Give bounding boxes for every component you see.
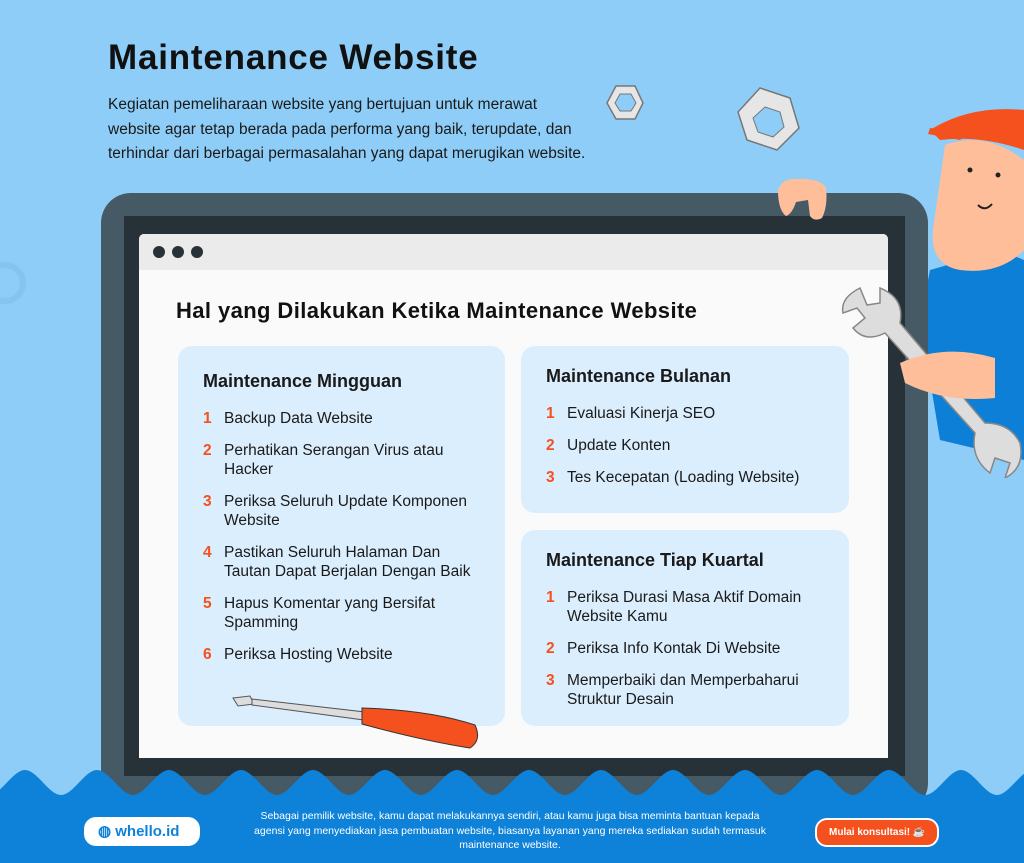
panel: monthly: Maintenance Bulanan — [546, 366, 731, 386]
panel: weekly: Perhatikan Serangan Virus atau Hacker — [224, 442, 443, 478]
panel: weekly: Periksa Hosting Website — [224, 646, 393, 663]
icon: screwdriver — [232, 696, 478, 748]
panel: quarterly: 2 — [546, 640, 555, 657]
panel: quarterly: Maintenance Tiap Kuartal — [546, 550, 764, 570]
panel: weekly: 1 — [203, 410, 212, 427]
browser bar — [139, 234, 888, 270]
panel: weekly: 6 — [203, 646, 212, 663]
panel: weekly: Pastikan Seluruh Halaman Dan Tautan Dapat Berjalan Dengan Baik — [224, 544, 470, 580]
panel: weekly: 4 — [203, 544, 212, 561]
panel: quarterly: 1 — [546, 589, 555, 606]
monitor bezel — [124, 216, 905, 776]
footer text: Sebagai pemilik website, kamu dapat melakukannya sendiri, atau kamu juga bisa meminta bantuan kepada agensi yang menyediakan jasa pembuatan website, biasanya layanan yang mereka sediakan sudah termasuk maintenance website. — [254, 810, 766, 851]
icon: hand on monitor — [778, 178, 826, 220]
panel: weekly — [178, 346, 505, 726]
panel: monthly — [521, 346, 849, 513]
panel: weekly: Periksa Seluruh Update Komponen Website — [224, 493, 467, 529]
panel: monthly: 1 — [546, 405, 555, 422]
character: worker — [928, 109, 1024, 460]
panel: monthly: 2 — [546, 437, 555, 454]
panel: weekly: Hapus Komentar yang Bersifat Spamming — [224, 595, 435, 631]
panel: quarterly — [521, 530, 849, 726]
panel: quarterly: Periksa Durasi Masa Aktif Domain Website Kamu — [567, 589, 801, 625]
icon: small nut — [607, 86, 643, 119]
intro text: website agar tetap berada pada performa yang baik, terupdate, dan — [108, 120, 572, 138]
monitor — [101, 193, 928, 813]
intro text — [108, 96, 585, 162]
title: Maintenance Website — [108, 38, 478, 77]
logo button: ◍ whello.id — [98, 823, 179, 840]
CTA button — [815, 818, 939, 847]
panel: weekly: 3 — [203, 493, 212, 510]
panel: weekly: 2 — [203, 442, 212, 459]
browser window — [139, 234, 888, 758]
CTA button: Mulai konsultasi! ☕ — [829, 827, 925, 838]
intro text: terhindar dari berbagai permasalahan yang dapat merugikan website. — [108, 145, 585, 162]
panel: monthly: Evaluasi Kinerja SEO — [567, 405, 715, 422]
panel: quarterly: Periksa Info Kontak Di Website — [567, 640, 780, 657]
panel: weekly: Backup Data Website — [224, 410, 373, 427]
footer — [0, 770, 1024, 863]
panel: monthly: 3 — [546, 469, 555, 486]
panel: monthly: Update Konten — [567, 437, 670, 454]
intro text: Kegiatan pemeliharaan website yang bertujuan untuk merawat — [108, 96, 537, 113]
panel: weekly: Maintenance Mingguan — [203, 371, 402, 391]
logo button — [84, 817, 200, 846]
panel: weekly: 5 — [203, 595, 212, 612]
panel: quarterly: Memperbaiki dan Memperbaharui Struktur Desain — [567, 672, 799, 708]
icon: wrench — [842, 286, 1022, 478]
icon: large nut — [738, 88, 799, 150]
panel: quarterly: 3 — [546, 672, 555, 689]
section heading: Hal yang Dilakukan Ketika Maintenance Website — [176, 298, 697, 323]
panel: monthly: Tes Kecepatan (Loading Website) — [567, 469, 799, 486]
